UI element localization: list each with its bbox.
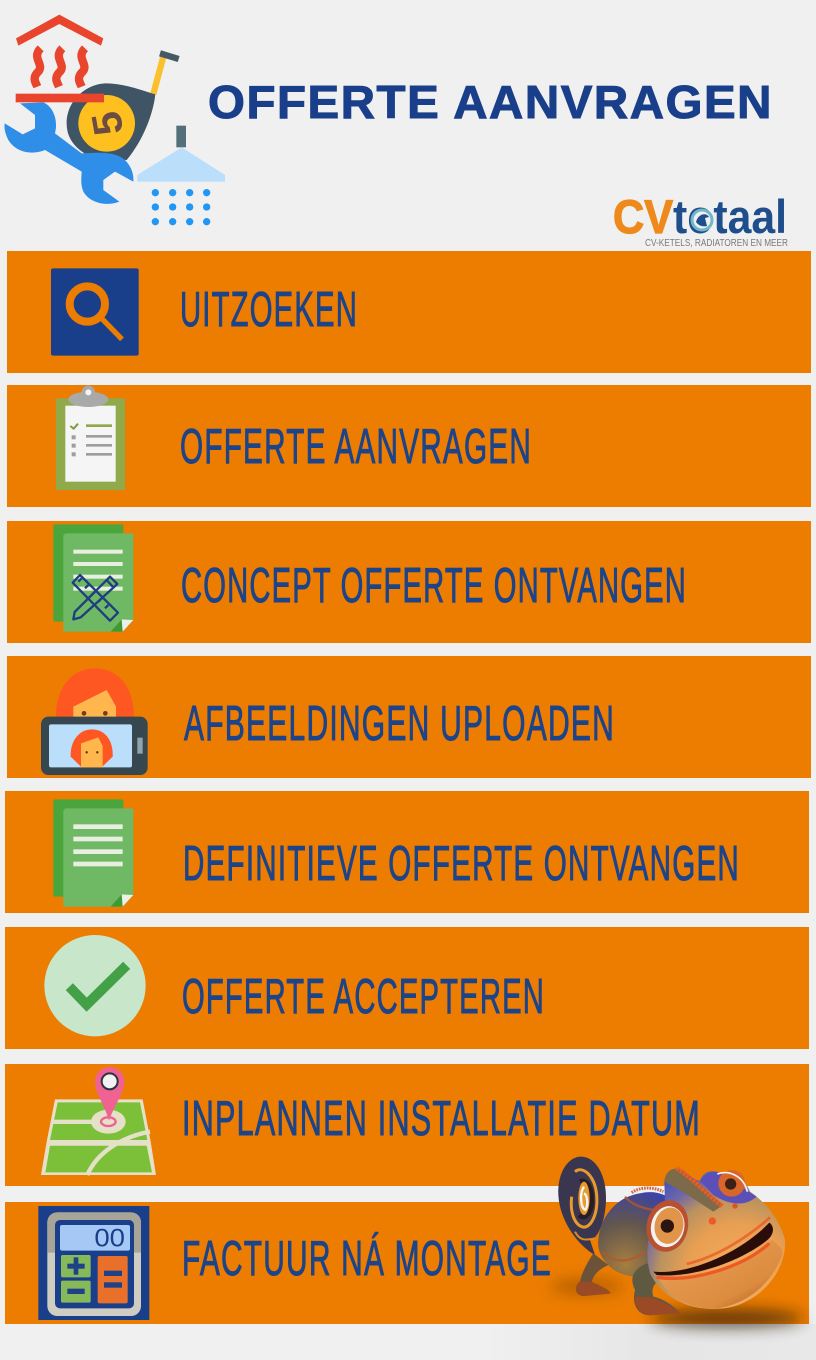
icon: clipboard checklist: [56, 386, 125, 490]
icon: map with pin: [41, 1067, 156, 1175]
panel: step 2: [7, 385, 811, 507]
logo: CVtotaal: totaal: [673, 190, 787, 243]
step label 2: OFFERTE AANVRAGEN: [180, 420, 532, 474]
tail spiral: [558, 1157, 606, 1255]
head: [647, 1169, 785, 1309]
icon: wrench: [4, 102, 133, 204]
panel: step 6: [5, 927, 809, 1049]
mouth: [653, 1223, 773, 1275]
icon: magnifying glass: [51, 268, 139, 356]
header illustration: tools: [4, 15, 225, 225]
icon: definitive document: [53, 799, 133, 907]
panel: step 1: [7, 251, 811, 373]
red heating base bar: [16, 94, 104, 102]
panel: step 5: [5, 791, 809, 913]
step label 1: UITZOEKEN: [180, 283, 358, 337]
step label 8: FACTUUR NÁ MONTAGE: [182, 1232, 552, 1286]
front leg: [632, 1263, 680, 1315]
mascot: chameleon: [550, 1157, 803, 1328]
icon: house with heating: [16, 15, 103, 87]
step label 6: OFFERTE ACCEPTEREN: [182, 970, 545, 1024]
icon: shower: [137, 126, 225, 225]
ground shadow: [650, 1309, 803, 1328]
eye front: [642, 1196, 693, 1256]
panel: step 7: [5, 1064, 809, 1186]
back leg: [576, 1253, 611, 1296]
icon: calculator: 00: [94, 1225, 125, 1253]
panel: step 4: [7, 656, 811, 778]
logo: CVtotaal: [613, 190, 788, 249]
panel: step 3: [7, 521, 811, 643]
icon: calculator: [38, 1206, 149, 1320]
icon: measuring tape: [67, 53, 179, 160]
panel: step 8: [5, 1202, 809, 1324]
eye back: [717, 1170, 747, 1197]
floor shadow below the mascot: [482, 1324, 816, 1360]
icon: check mark circle: [44, 935, 146, 1036]
icon: concept document with ruler and pencil: [53, 524, 133, 632]
icon: person with smartphone: [41, 668, 148, 775]
title: OFFERTE AANVRAGEN: [208, 76, 773, 128]
body: [598, 1192, 677, 1277]
icon: measuring tape: 5: [82, 108, 132, 139]
logo: CVtotaal: CV: [613, 190, 674, 243]
